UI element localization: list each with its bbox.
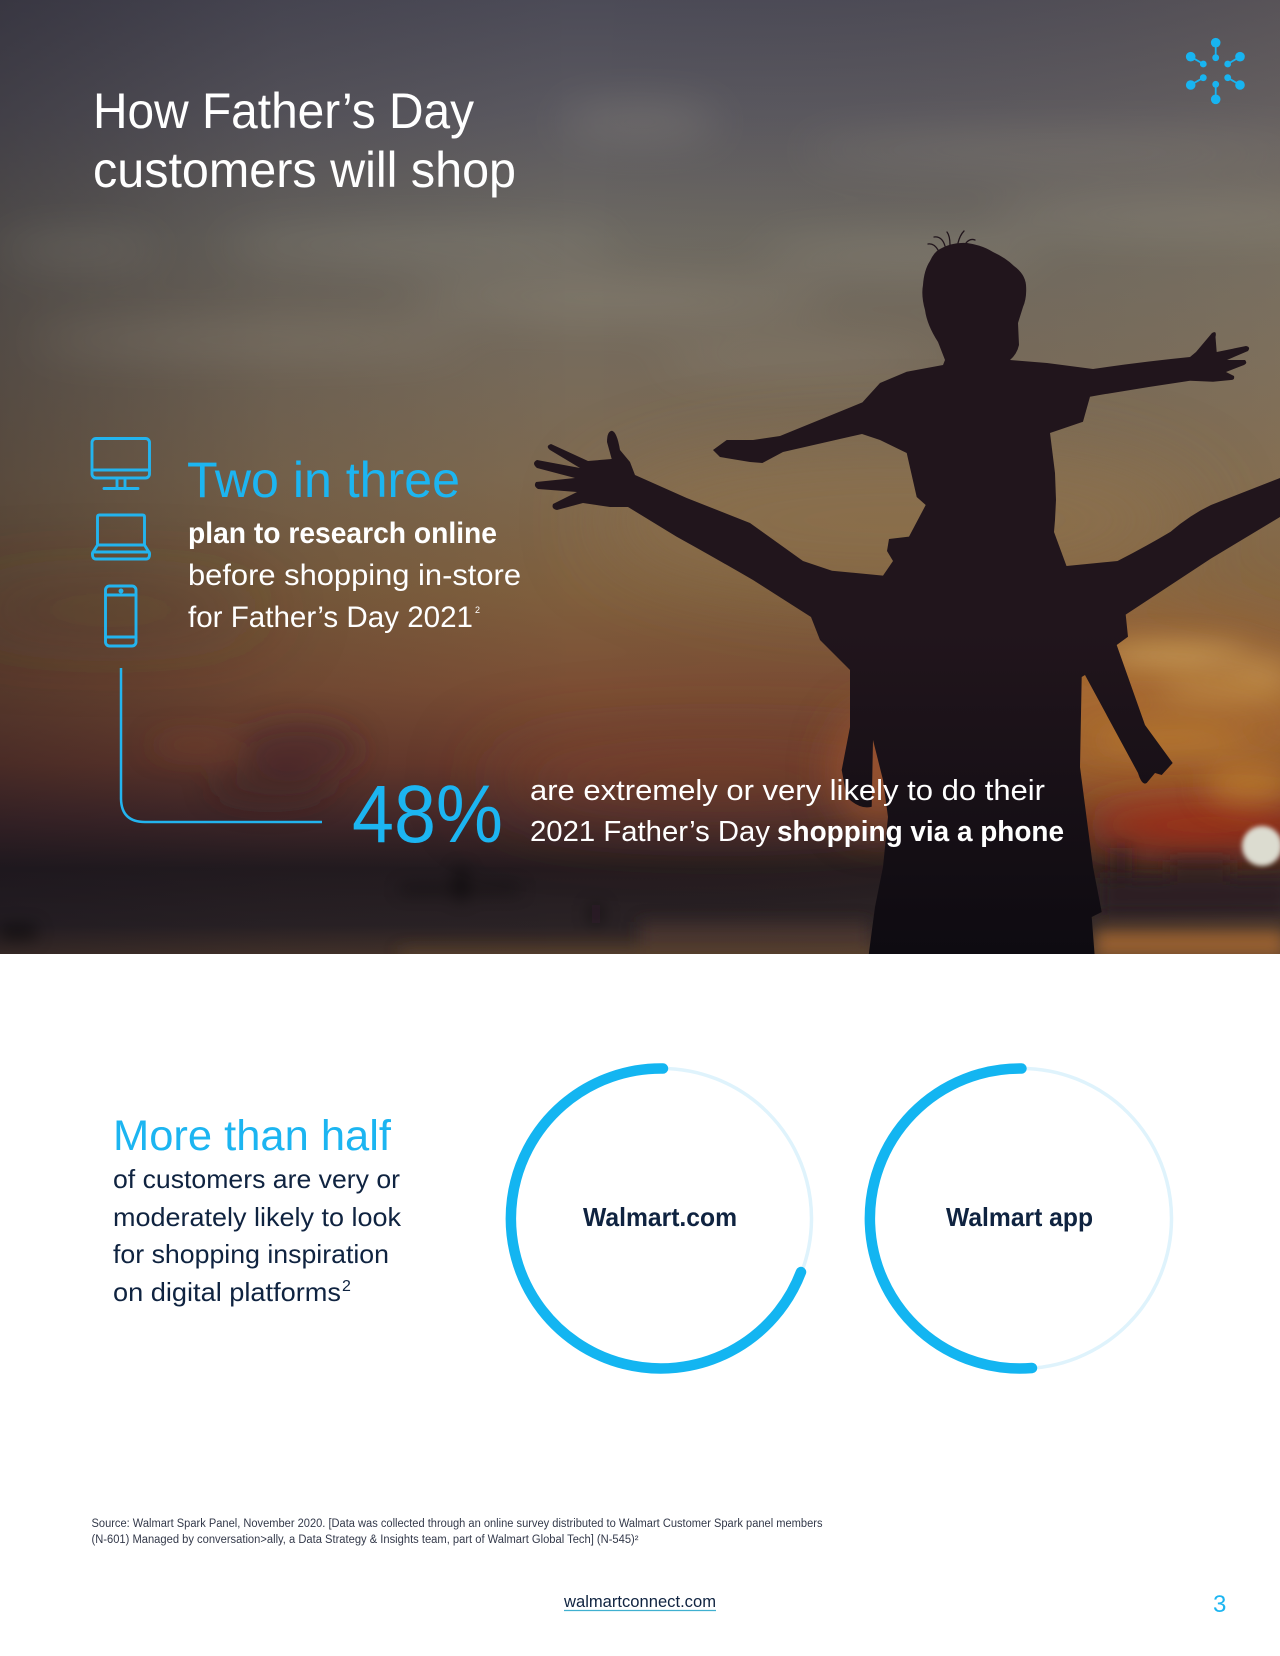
body text: of customers are very or	[113, 1164, 400, 1194]
illustration: silhouette of father and child	[534, 231, 1280, 960]
icon: desktop monitor	[92, 438, 150, 488]
icon: smartphone	[106, 586, 136, 646]
body text: for shopping inspiration	[113, 1239, 389, 1269]
heading: two in three: Two in three	[187, 452, 460, 508]
source footnote: (N-601) Managed by conversation>ally, a Data Strategy & Insights team, part of Walmart Global Tech] (N-545)²	[92, 1534, 639, 1546]
title	[93, 83, 516, 198]
panel: sunset photo background	[0, 0, 1280, 960]
text block: more than half	[113, 1112, 402, 1307]
source footnote	[92, 1518, 823, 1546]
body text	[113, 1164, 402, 1307]
stat description: are extremely or very likely to do their	[530, 775, 1045, 807]
icon: laptop	[92, 515, 150, 559]
body text: 2	[342, 1278, 351, 1295]
connector line	[121, 668, 322, 822]
hair tufts	[928, 231, 975, 250]
body text: 2	[475, 605, 480, 615]
body text: for Father’s Day 2021	[188, 601, 473, 634]
title: How Father’s Day	[93, 83, 474, 139]
page number: 3	[1213, 1591, 1226, 1618]
stat description: shopping via a phone	[777, 816, 1064, 848]
title: customers will shop	[93, 142, 516, 198]
label: Walmart.com: Walmart.com	[583, 1202, 737, 1232]
bold line: plan to research online	[188, 517, 497, 550]
text block: two in three	[187, 452, 521, 634]
stat description	[530, 775, 1064, 848]
label: Walmart app: Walmart app	[946, 1202, 1093, 1232]
source footnote: Source: Walmart Spark Panel, November 2020. [Data was collected through an online survey distributed to Walmart Customer Spark panel members	[92, 1518, 823, 1530]
heading: more than half: More than half	[113, 1112, 392, 1160]
stat description: 2021 Father’s Day	[530, 816, 770, 848]
body text	[188, 559, 521, 634]
icon: network logo	[1186, 38, 1245, 104]
body text: before shopping in-store	[188, 559, 521, 592]
stat: 48%: 48%	[352, 769, 503, 860]
chart: Walmart.com ring	[511, 1068, 812, 1368]
body text: on digital platforms	[113, 1277, 341, 1307]
footer link: walmartconnect.com	[563, 1592, 716, 1611]
chart: Walmart app ring	[870, 1068, 1172, 1368]
body text: moderately likely to look	[113, 1202, 402, 1232]
icon: sun	[1242, 826, 1280, 866]
